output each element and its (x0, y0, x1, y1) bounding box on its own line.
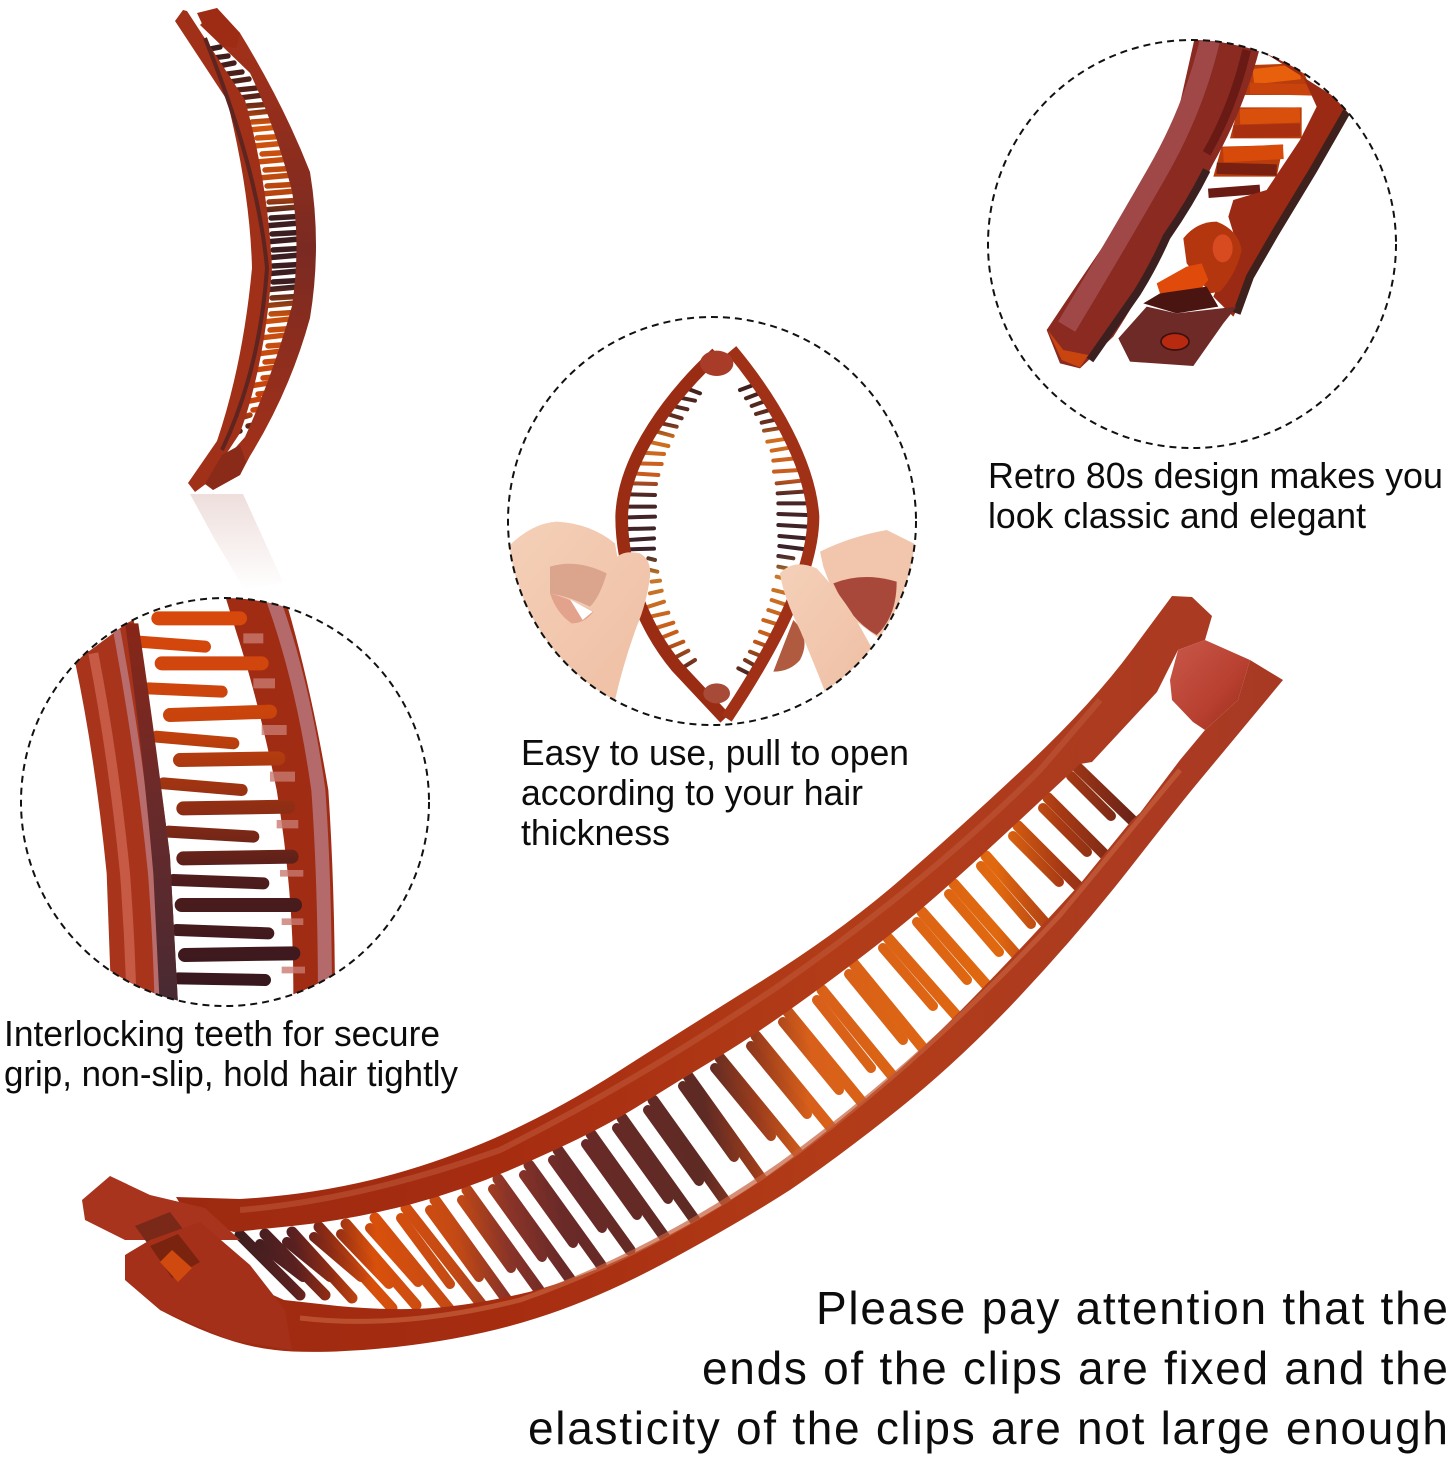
rail notches (243, 633, 305, 973)
caption: easy to use: thickness (521, 812, 670, 853)
left arm of clip (622, 353, 725, 718)
left hand (500, 522, 650, 700)
teeth backing (1213, 63, 1313, 177)
oval teeth (628, 385, 807, 675)
long teeth (240, 766, 1132, 1310)
notice: fixed ends warning: ends of the clips are fixed and the (702, 1342, 1448, 1394)
upper rail (176, 596, 1212, 1232)
right end block (1170, 640, 1250, 730)
teeth (205, 47, 308, 434)
back rail (200, 8, 316, 490)
bottom knob (703, 683, 730, 703)
front rail (75, 618, 178, 1010)
caption: easy to use (521, 732, 909, 853)
caption: interlocking teeth (4, 1013, 458, 1094)
base plate (1118, 307, 1237, 366)
front rail (1047, 37, 1259, 368)
product photo: upright banana clip (175, 8, 316, 590)
notice: fixed ends warning: Please pay attention that the (816, 1282, 1448, 1334)
clip reflection (190, 494, 283, 590)
caption: retro design (988, 455, 1443, 536)
back teeth (158, 618, 295, 955)
teeth bars (1208, 72, 1313, 193)
clip back behind hand (773, 620, 805, 672)
caption: interlocking teeth: Interlocking teeth for secure (4, 1013, 440, 1054)
caption: easy to use: Easy to use, pull to open (521, 732, 909, 773)
circle photo content (500, 350, 917, 718)
dark edge band (125, 623, 178, 1010)
caption: easy to use: according to your hair (521, 772, 863, 813)
caption: interlocking teeth: grip, non-slip, hold hair tightly (4, 1053, 458, 1094)
front rail (175, 10, 272, 492)
zoom circle: interlocking teeth (21, 590, 429, 1010)
dashed circle outline (21, 598, 429, 1006)
left end block (82, 1176, 292, 1350)
back rail (223, 590, 335, 1010)
top hinge (197, 8, 240, 48)
hinge (1183, 222, 1242, 293)
lower rail (160, 660, 1283, 1352)
circle photo content (75, 590, 335, 1010)
caption: retro design: look classic and elegant (988, 495, 1366, 536)
product photo: large horizontal banana clip (82, 596, 1283, 1352)
zoom circle: hands opening clip (500, 317, 917, 725)
dashed circle outline (988, 40, 1396, 448)
back rail (1213, 50, 1350, 317)
notice: fixed ends warning (528, 1282, 1448, 1454)
zoom circle: clip end detail (988, 37, 1396, 448)
notice: fixed ends warning: elasticity of the clips are not large enough (528, 1402, 1448, 1454)
right arm of clip (727, 350, 813, 718)
dashed circle outline (508, 317, 916, 725)
right hand (780, 530, 917, 692)
circle photo content (1047, 37, 1350, 368)
top knob (700, 351, 733, 376)
front teeth (138, 642, 268, 980)
short teeth (260, 776, 1111, 1284)
bottom hinge (205, 445, 246, 490)
caption: retro design: Retro 80s design makes you (988, 455, 1443, 496)
